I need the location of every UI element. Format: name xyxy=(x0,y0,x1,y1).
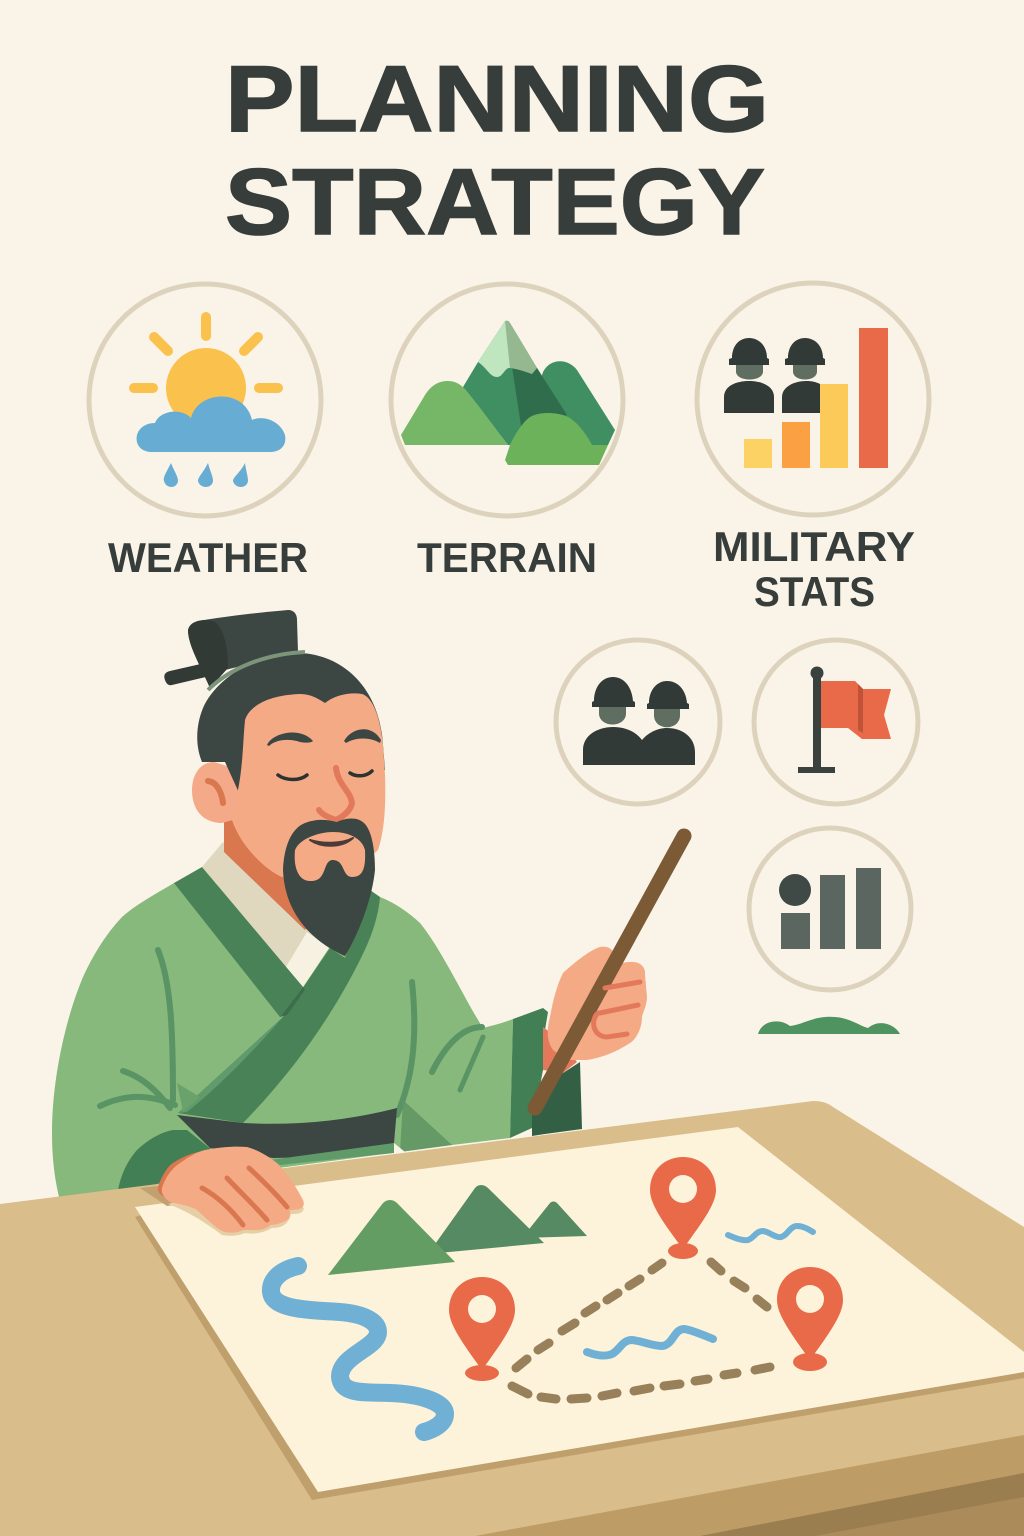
robe xyxy=(52,883,513,1197)
face xyxy=(232,693,385,885)
icon: red flag badge xyxy=(754,640,918,804)
map streams xyxy=(587,1226,813,1355)
label: weather: WEATHER xyxy=(108,534,308,581)
mouth area xyxy=(295,832,365,881)
left sleeve shade xyxy=(118,1130,212,1190)
label: military stats: STATS xyxy=(754,568,875,615)
panel: map xyxy=(135,1127,1024,1500)
icon: sun and rain cloud xyxy=(134,317,285,487)
sleeve cuff xyxy=(510,1008,548,1138)
hair xyxy=(197,653,385,795)
title: PLANNING xyxy=(225,46,769,151)
ear xyxy=(192,762,240,823)
inner collar xyxy=(202,842,329,987)
label: military stats xyxy=(713,523,915,615)
robe fold lines xyxy=(100,950,483,1115)
illustration: strategist xyxy=(52,610,684,1197)
map mountains xyxy=(328,1185,587,1275)
panel: terrain xyxy=(391,284,623,581)
collar band left xyxy=(174,867,303,1017)
icon: soldiers and bars xyxy=(724,328,888,468)
beard xyxy=(283,818,375,956)
sash xyxy=(177,1108,397,1158)
map route xyxy=(512,1262,770,1399)
icon: soldiers badge xyxy=(556,640,720,804)
closed eyes xyxy=(278,775,307,780)
icon: mountains xyxy=(401,321,615,465)
icon: bar chart badge xyxy=(749,828,911,990)
neck xyxy=(224,820,330,930)
map pin 2 xyxy=(449,1277,515,1381)
label: terrain: TERRAIN xyxy=(417,534,597,581)
collar band right xyxy=(178,890,380,1123)
panel: weather xyxy=(89,284,321,581)
hat xyxy=(164,610,298,688)
icon: left hand on map xyxy=(140,1147,304,1236)
eyebrows xyxy=(267,732,313,746)
right hand xyxy=(535,836,684,1108)
fold shade xyxy=(177,1083,200,1112)
map pin 3 xyxy=(777,1267,843,1371)
map pin 1 xyxy=(650,1157,716,1259)
title xyxy=(225,46,769,254)
nose xyxy=(319,768,352,820)
lower robe shade xyxy=(400,1100,452,1152)
icon: small green hills xyxy=(758,1017,900,1034)
panel: military stats xyxy=(697,283,929,615)
table xyxy=(0,1101,1024,1536)
map river xyxy=(271,1266,445,1432)
label: military stats: MILITARY xyxy=(713,523,915,570)
title: STRATEGY xyxy=(225,149,765,254)
